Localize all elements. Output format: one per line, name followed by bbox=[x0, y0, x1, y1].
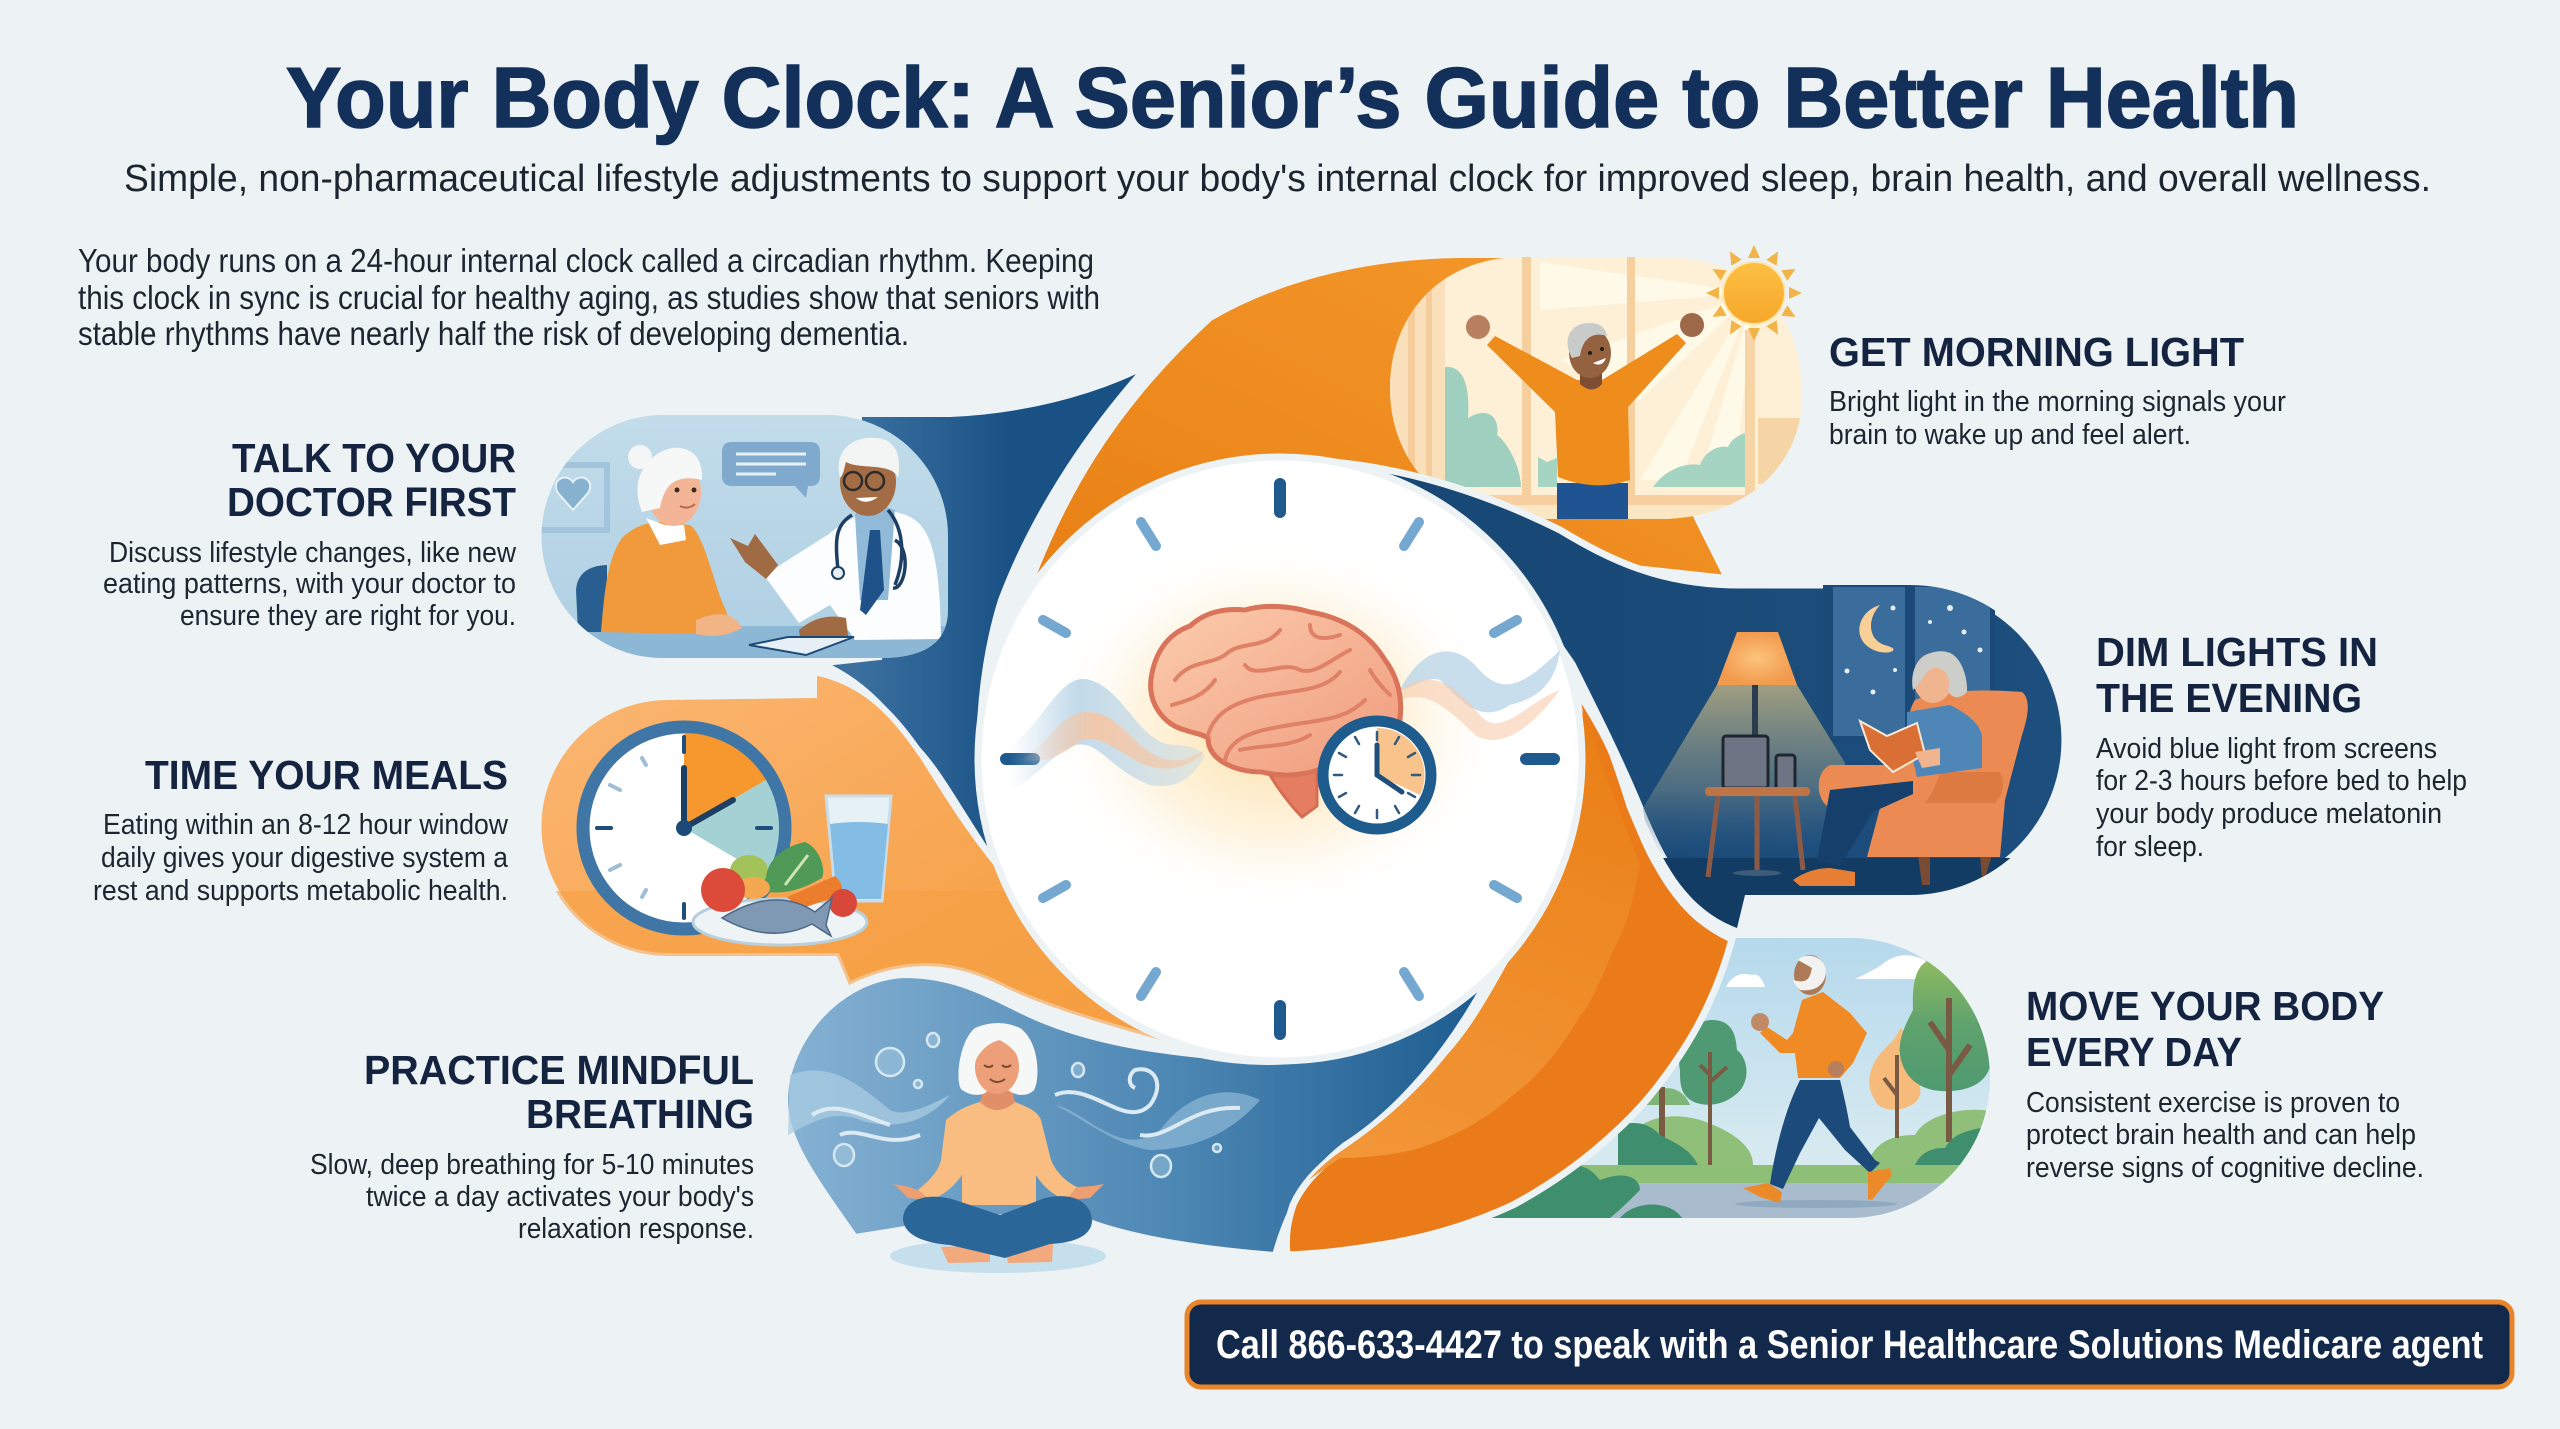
panel: morning light illustration bbox=[1390, 245, 1802, 520]
panel: meal timing swoosh bbox=[530, 672, 1170, 1041]
bubbles bbox=[834, 1033, 1221, 1177]
step: dim lights in the evening bbox=[2096, 629, 2467, 863]
step: time your meals: TIME YOUR MEALS bbox=[145, 752, 508, 798]
step: dim lights in the evening: for 2-3 hours before bed to help bbox=[2096, 765, 2467, 797]
step: dim lights in the evening: THE EVENING bbox=[2096, 675, 2362, 721]
doctor bbox=[730, 438, 941, 640]
intro paragraph bbox=[78, 242, 1100, 352]
step: move your body every day: EVERY DAY bbox=[2026, 1029, 2242, 1075]
clipboard bbox=[749, 637, 854, 655]
glow bbox=[1045, 540, 1505, 910]
major ticks bbox=[1006, 484, 1554, 1034]
step: practice mindful breathing: twice a day activates your body's bbox=[366, 1181, 754, 1213]
swoosh: orange top bbox=[1024, 255, 1727, 600]
trees bbox=[1490, 960, 1995, 1218]
step: move your body every day: protect brain health and can help bbox=[2026, 1119, 2416, 1151]
panel: dim lights swoosh and scene bbox=[1333, 462, 2080, 938]
intro paragraph: this clock in sync is crucial for healthy aging, as studies show that seniors with bbox=[78, 279, 1100, 316]
step: dim lights in the evening: DIM LIGHTS IN bbox=[2096, 629, 2378, 675]
step: get morning light bbox=[1829, 329, 2286, 451]
step: get morning light: Bright light in the morning signals your bbox=[1829, 386, 2286, 418]
step: time your meals: rest and supports metabolic health. bbox=[93, 875, 508, 907]
wall monitor bbox=[530, 465, 607, 530]
intro paragraph: stable rhythms have nearly half the risk of developing dementia. bbox=[78, 315, 909, 352]
step: get morning light: brain to wake up and feel alert. bbox=[1829, 419, 2191, 451]
step: talk to your doctor first: ensure they are right for you. bbox=[180, 600, 516, 632]
reading woman bbox=[1793, 651, 1982, 886]
step: talk to your doctor first bbox=[103, 435, 517, 632]
meal clock bbox=[583, 727, 785, 929]
step: practice mindful breathing: PRACTICE MINDFUL bbox=[364, 1047, 754, 1093]
step: talk to your doctor first: Discuss lifestyle changes, like new bbox=[109, 537, 517, 569]
brain illustration bbox=[1151, 606, 1401, 817]
panel: doctor consultation illustration bbox=[530, 415, 960, 666]
step: talk to your doctor first: eating patterns, with your doctor to bbox=[103, 568, 516, 600]
step: dim lights in the evening: Avoid blue light from screens bbox=[2096, 733, 2437, 765]
grass and path bbox=[1580, 1110, 1986, 1218]
elderly woman bbox=[601, 445, 742, 636]
subtitle: Simple, non-pharmaceutical lifestyle adjustments to support your body's internal clock for improved sleep, brain health, and overall wellness. bbox=[124, 158, 2431, 200]
lamp light cone bbox=[1643, 685, 1845, 858]
step: talk to your doctor first: TALK TO YOUR bbox=[232, 435, 516, 481]
minor ticks bbox=[1043, 522, 1517, 996]
step: get morning light: GET MORNING LIGHT bbox=[1829, 329, 2244, 375]
step: time your meals: daily gives your digestive system a bbox=[101, 842, 509, 874]
panel: walking illustration bbox=[1490, 938, 2010, 1219]
step: practice mindful breathing: relaxation response. bbox=[518, 1213, 754, 1245]
armchair bbox=[1819, 690, 2028, 885]
clock face bbox=[978, 457, 1582, 1061]
night window bbox=[1823, 585, 1995, 743]
step: dim lights in the evening: your body produce melatonin bbox=[2096, 798, 2442, 830]
call to action bbox=[1187, 1302, 2512, 1387]
step: practice mindful breathing bbox=[310, 1047, 754, 1245]
breath waves bbox=[788, 1069, 1260, 1150]
swoosh: orange lower right bbox=[1280, 680, 1732, 1255]
step: practice mindful breathing: Slow, deep breathing for 5-10 minutes bbox=[310, 1149, 754, 1181]
circadian waves bbox=[1010, 650, 1560, 790]
step: dim lights in the evening: for sleep. bbox=[2096, 831, 2204, 863]
step: time your meals: Eating within an 8-12 hour window bbox=[103, 809, 509, 841]
small clock badge bbox=[1323, 721, 1431, 829]
floor lamp bbox=[1717, 632, 1797, 740]
sun bbox=[1706, 245, 1802, 341]
chair bbox=[576, 565, 607, 632]
speech bubble bbox=[722, 442, 820, 498]
intro paragraph: Your body runs on a 24-hour internal clock called a circadian rhythm. Keeping bbox=[78, 242, 1094, 279]
step: move your body every day bbox=[2026, 983, 2424, 1184]
glass of water bbox=[826, 796, 891, 901]
step: move your body every day: MOVE YOUR BODY bbox=[2026, 983, 2384, 1029]
step: move your body every day: reverse signs of cognitive decline. bbox=[2026, 1152, 2424, 1184]
step: time your meals bbox=[93, 752, 509, 907]
light rays bbox=[1540, 262, 1754, 480]
plate of food bbox=[693, 842, 867, 945]
panel: mindful breathing bbox=[785, 975, 1489, 1273]
swoosh: dark blue left bbox=[825, 368, 1144, 860]
man with raised arms bbox=[1466, 313, 1704, 519]
clouds bbox=[1726, 955, 1928, 987]
meditating woman bbox=[890, 1023, 1106, 1273]
step: move your body every day: Consistent exercise is proven to bbox=[2026, 1087, 2400, 1119]
step: practice mindful breathing: BREATHING bbox=[526, 1091, 754, 1137]
title: Your Body Clock: A Senior’s Guide to Better Health bbox=[286, 51, 2299, 146]
step: talk to your doctor first: DOCTOR FIRST bbox=[227, 479, 516, 525]
walking man bbox=[1735, 955, 1897, 1208]
side table with tablet and phone bbox=[1705, 736, 1810, 877]
